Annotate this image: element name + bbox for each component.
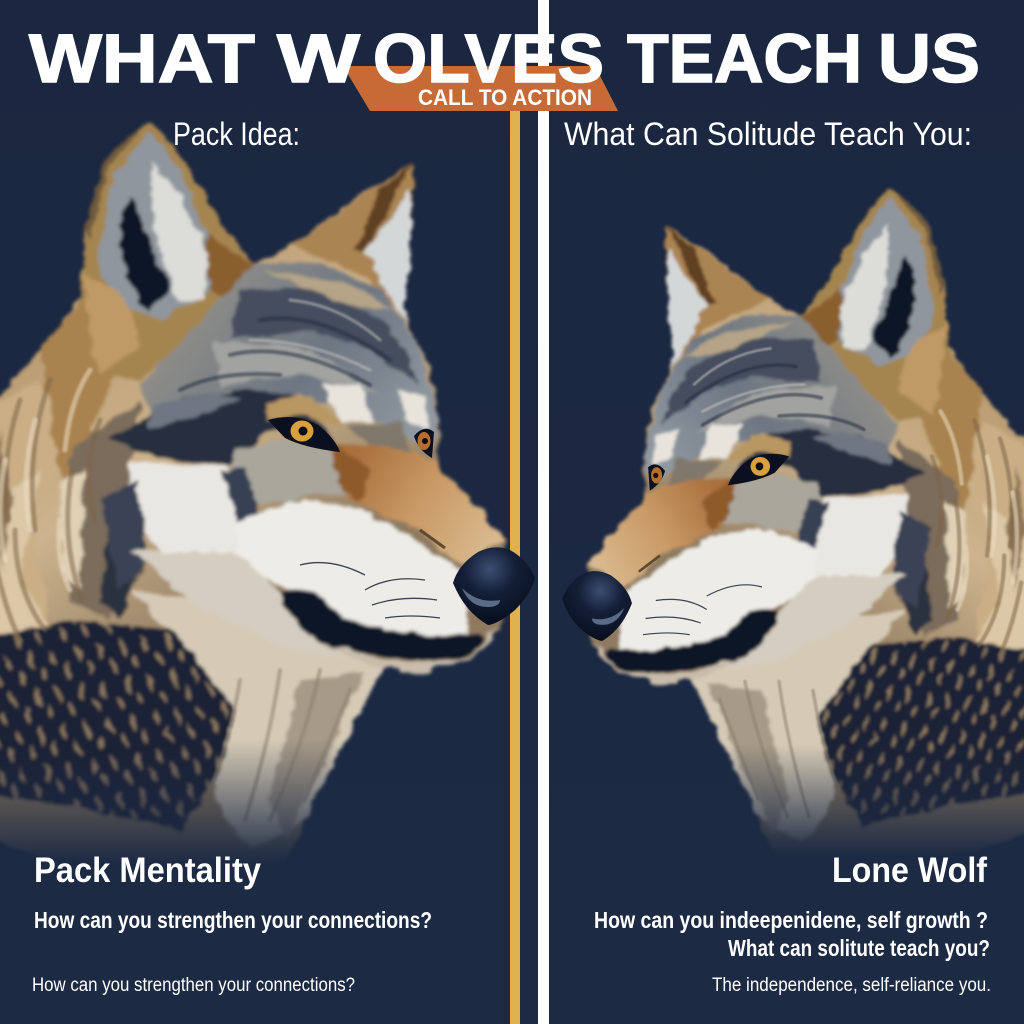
whisker dots xyxy=(300,530,445,618)
nose xyxy=(453,547,535,625)
gold divider bar xyxy=(510,108,520,1024)
right panel text xyxy=(594,851,991,996)
tan muzzle bridge xyxy=(340,445,505,568)
forehead and crown xyxy=(140,262,440,450)
dark mane xyxy=(0,620,245,830)
right panel text: The independence, self-reliance you. xyxy=(712,975,991,996)
ruff fur shading xyxy=(0,300,150,660)
left panel text: How can you strengthen your connections? xyxy=(32,975,355,996)
title: TEACH xyxy=(627,20,862,97)
illustration: left pack wolf xyxy=(0,120,535,880)
title: OLVES xyxy=(373,20,604,97)
banner label: CALL TO ACTION xyxy=(418,85,592,110)
title xyxy=(29,20,980,97)
left ear xyxy=(80,120,255,380)
left panel text xyxy=(32,851,432,996)
orange banner xyxy=(343,66,618,111)
left panel text: How can you strengthen your connections? xyxy=(34,907,432,933)
white divider bar xyxy=(538,0,549,1024)
illustration: right lone wolf xyxy=(562,186,1024,871)
dark eye band xyxy=(110,388,335,465)
left subheading: Pack Idea: xyxy=(173,116,300,152)
right panel text: Lone Wolf xyxy=(832,851,987,890)
mouth xyxy=(284,590,482,662)
left panel text: Pack Mentality xyxy=(34,851,261,890)
fur strands xyxy=(0,300,390,820)
wolf body silhouette xyxy=(0,120,505,880)
title: WHAT xyxy=(29,20,255,97)
title: US xyxy=(878,20,980,97)
right ear xyxy=(292,162,412,320)
grey cheek xyxy=(225,440,345,505)
white muzzle xyxy=(235,500,470,640)
cream chest fur xyxy=(130,590,385,850)
title: W xyxy=(277,20,361,97)
eyes xyxy=(268,417,434,458)
white brow markings xyxy=(320,385,372,420)
right subheading: What Can Solitude Teach You: xyxy=(564,116,972,152)
